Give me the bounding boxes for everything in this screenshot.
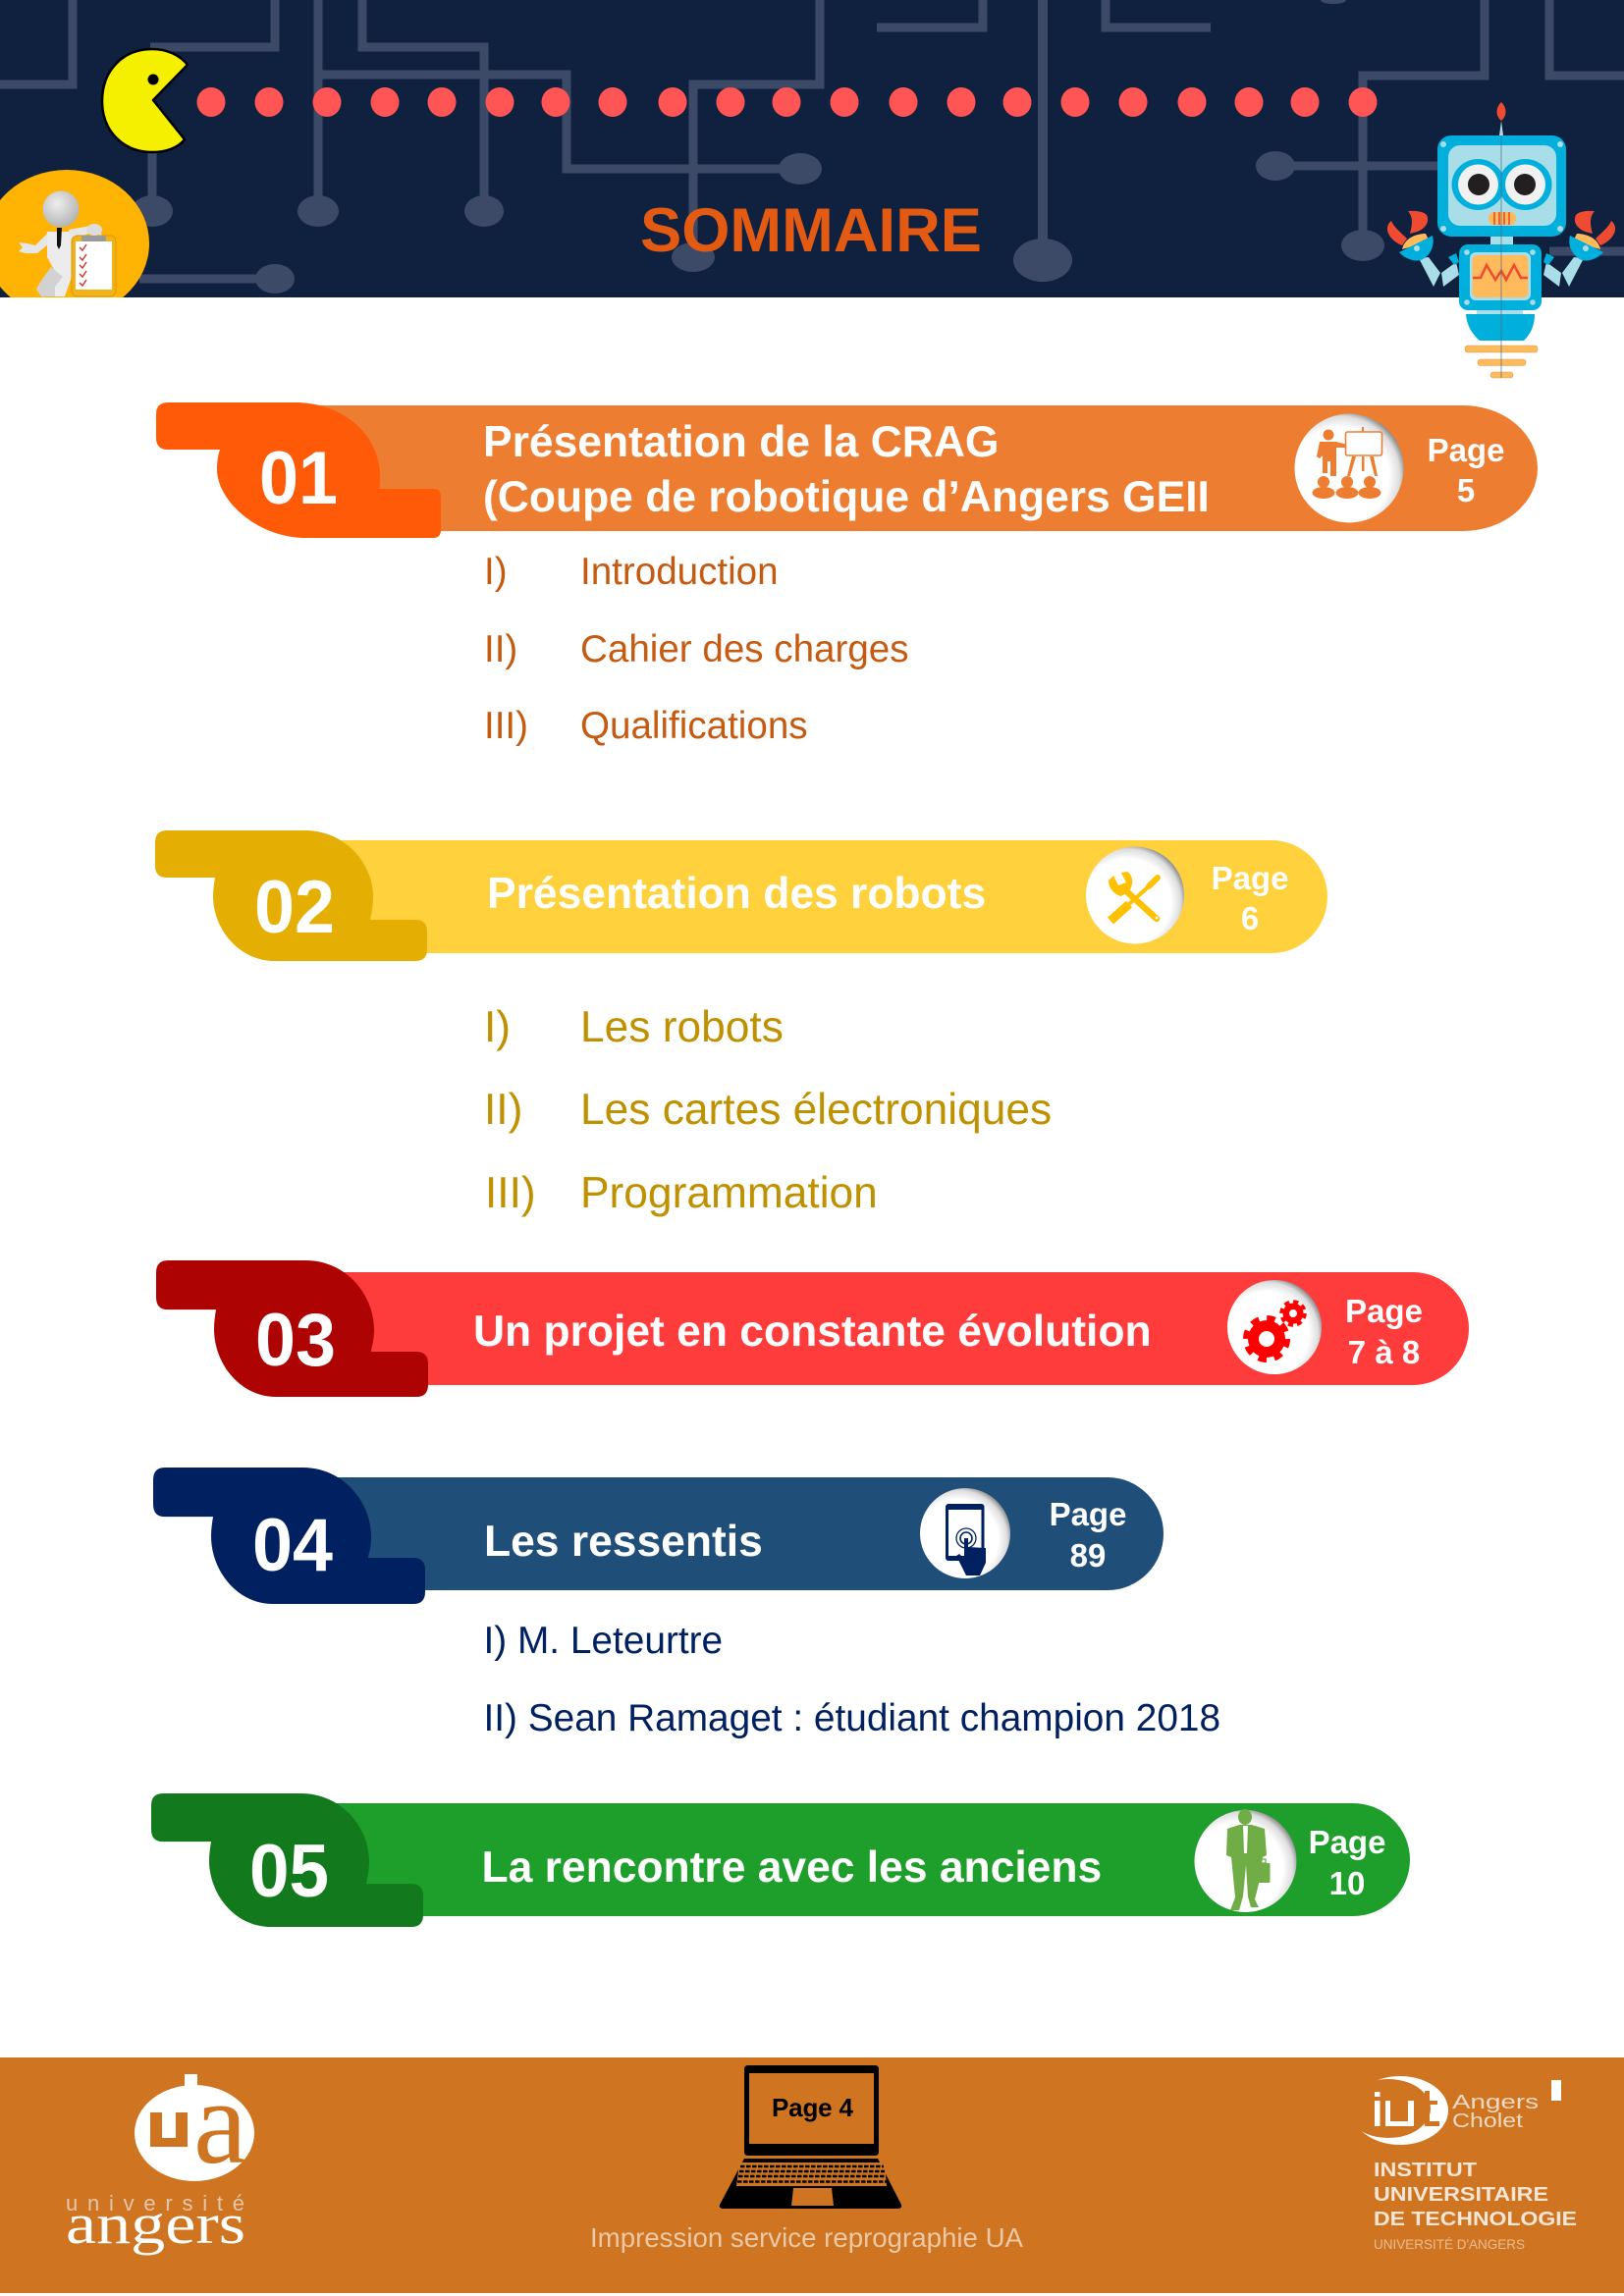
- heading 04: Les ressentis: [484, 1518, 763, 1566]
- page ref 03: Page: [1345, 1293, 1423, 1329]
- robot right arm: [1543, 211, 1615, 287]
- logo: université d'Angers: a: [193, 2056, 247, 2189]
- bar 03: [275, 1272, 1469, 1385]
- list 01: III): [484, 705, 528, 747]
- heading 01: Présentation de la CRAG: [483, 418, 999, 466]
- list 01: Cahier des charges: [580, 628, 909, 670]
- title: SOMMAIRE: [640, 196, 982, 265]
- logo: IUT Angers Cholet: [1346, 2076, 1577, 2252]
- list 02: [484, 1003, 1052, 1217]
- icon: phone touch: [920, 1488, 1010, 1578]
- page ref 01: Page: [1428, 432, 1504, 468]
- list 01: Qualifications: [580, 705, 808, 747]
- icon: wrench and screwdriver: [1086, 846, 1184, 944]
- logo: IUT Angers Cholet: DE TECHNOLOGIE: [1374, 2209, 1577, 2230]
- panel: section 02: [155, 830, 1327, 1217]
- heading 02: Présentation des robots: [487, 870, 986, 918]
- logo: IUT Angers Cholet: UNIVERSITÉ D'ANGERS: [1374, 2236, 1525, 2252]
- print credit: Impression service reprographie UA: [590, 2222, 1024, 2253]
- page ref 05: Page: [1309, 1824, 1385, 1860]
- page ref 04: [1050, 1496, 1126, 1574]
- page ref 04: 89: [1070, 1537, 1106, 1574]
- number 04: 04: [252, 1504, 333, 1587]
- page ref 04: Page: [1050, 1496, 1126, 1532]
- page ref 01: [1428, 432, 1504, 508]
- number 02: 02: [254, 866, 335, 949]
- header banner: [0, 0, 1624, 297]
- list 02: Les cartes électroniques: [580, 1086, 1052, 1134]
- panel: section 04: [153, 1468, 1220, 1739]
- number 01: 01: [259, 437, 338, 520]
- list 01: I): [484, 551, 508, 593]
- list 02: II): [484, 1086, 522, 1134]
- page ref 01: 5: [1457, 472, 1475, 508]
- icon: gears: [1227, 1280, 1322, 1374]
- list 02: Programmation: [580, 1169, 878, 1217]
- panel: section 05: [151, 1793, 1410, 1927]
- list 04: II) Sean Ramaget : étudiant champion 2018: [483, 1697, 1220, 1739]
- list 04: [483, 1620, 1220, 1739]
- logo: université d'Angers: université: [66, 2191, 244, 2216]
- icon: laptop with page number: Page 4: [772, 2093, 854, 2122]
- page ref 05: 10: [1329, 1865, 1365, 1901]
- list 01: II): [484, 628, 517, 670]
- page ref 02: Page: [1212, 860, 1288, 896]
- badge 01: [156, 402, 441, 538]
- list 01: [484, 551, 909, 747]
- logo: IUT Angers Cholet: Angers: [1452, 2092, 1539, 2113]
- page ref 02: [1212, 860, 1288, 936]
- page ref 05: [1309, 1824, 1385, 1901]
- pac-dots row: [196, 87, 1377, 117]
- logo: université d'Angers: [66, 2056, 254, 2256]
- badge 04: [153, 1468, 425, 1604]
- page ref 03: 7 à 8: [1348, 1334, 1420, 1370]
- icon: businessman: [1194, 1809, 1296, 1912]
- badge 05: [151, 1793, 423, 1927]
- list 02: I): [484, 1003, 511, 1051]
- badge 03: [156, 1260, 428, 1397]
- icon: robot: [1387, 102, 1615, 378]
- logo: IUT Angers Cholet: UNIVERSITAIRE: [1374, 2184, 1548, 2206]
- heading 01: (Coupe de robotique d’Angers GEII: [483, 473, 1210, 521]
- footer band: [0, 2057, 1624, 2293]
- icon: laptop with page number: [720, 2065, 901, 2209]
- page ref 02: 6: [1241, 900, 1259, 936]
- heading 05: La rencontre avec les anciens: [481, 1843, 1102, 1892]
- icon: figure with checklist: [0, 170, 149, 297]
- number 03: 03: [255, 1299, 336, 1382]
- list 02: Les robots: [580, 1003, 784, 1051]
- page ref 03: [1345, 1293, 1423, 1370]
- badge 02: [155, 830, 427, 961]
- logo: IUT Angers Cholet: Cholet: [1452, 2110, 1524, 2132]
- icon: pacman: [102, 49, 188, 152]
- list 02: III): [485, 1169, 536, 1217]
- bar 05: [275, 1803, 1410, 1916]
- icon: presenter and audience: [1294, 414, 1404, 522]
- logo: IUT Angers Cholet: INSTITUT: [1374, 2160, 1477, 2181]
- bar 02: [275, 840, 1327, 953]
- bar 01: [275, 405, 1538, 531]
- panel: section 03: [156, 1260, 1469, 1397]
- list 04: I) M. Leteurtre: [483, 1620, 723, 1662]
- heading 03: Un projet en constante évolution: [473, 1308, 1152, 1356]
- bar 04: [275, 1477, 1164, 1590]
- heading 01: [483, 418, 1210, 521]
- robot left arm: [1387, 211, 1459, 287]
- list 01: Introduction: [580, 551, 779, 593]
- logo: université d'Angers: angers: [66, 2192, 245, 2256]
- panel: section 01: [156, 402, 1538, 747]
- number 05: 05: [249, 1830, 329, 1913]
